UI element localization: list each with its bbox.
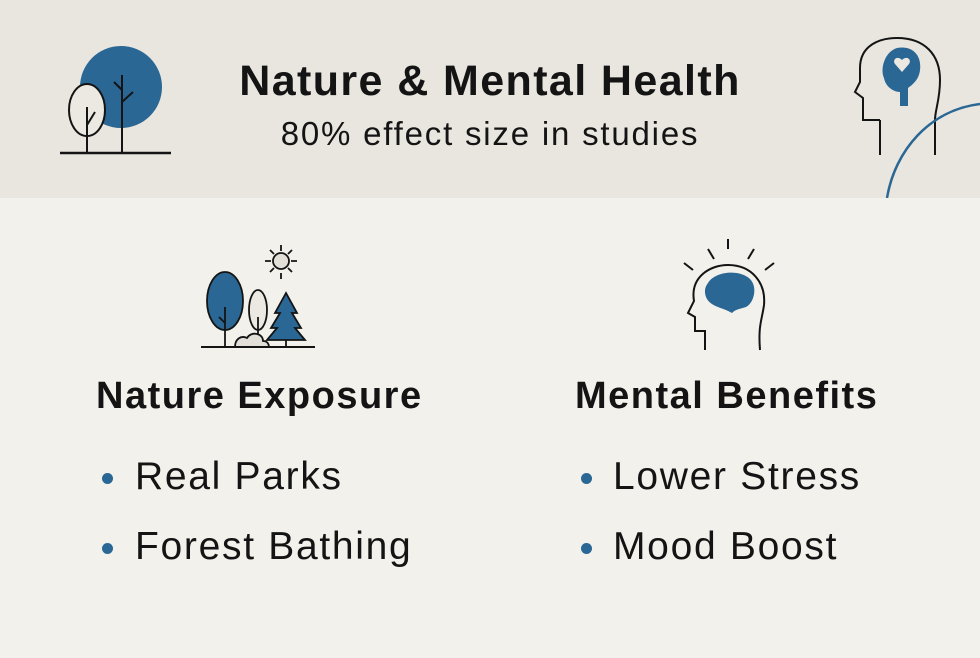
- icon: nature scene: [201, 245, 315, 348]
- icon: head with rays: [683, 239, 775, 350]
- list: mental benefits: Lower Stress: [613, 455, 861, 498]
- heading: Nature Exposure: Nature Exposure: [96, 375, 423, 417]
- list: nature exposure: [102, 455, 412, 568]
- list: mental benefits: Mood Boost: [613, 525, 838, 568]
- list: mental benefits: [581, 455, 861, 568]
- list: nature exposure: Real Parks: [135, 455, 343, 498]
- icon: header trees: [60, 46, 171, 154]
- title: Nature & Mental Health: [239, 57, 741, 105]
- heading: Mental Benefits: Mental Benefits: [575, 375, 878, 417]
- subtitle: 80% effect size in studies: [281, 115, 699, 152]
- header band: [0, 0, 980, 198]
- list: nature exposure: Forest Bathing: [135, 525, 412, 568]
- icon: header head with brain: [854, 37, 980, 198]
